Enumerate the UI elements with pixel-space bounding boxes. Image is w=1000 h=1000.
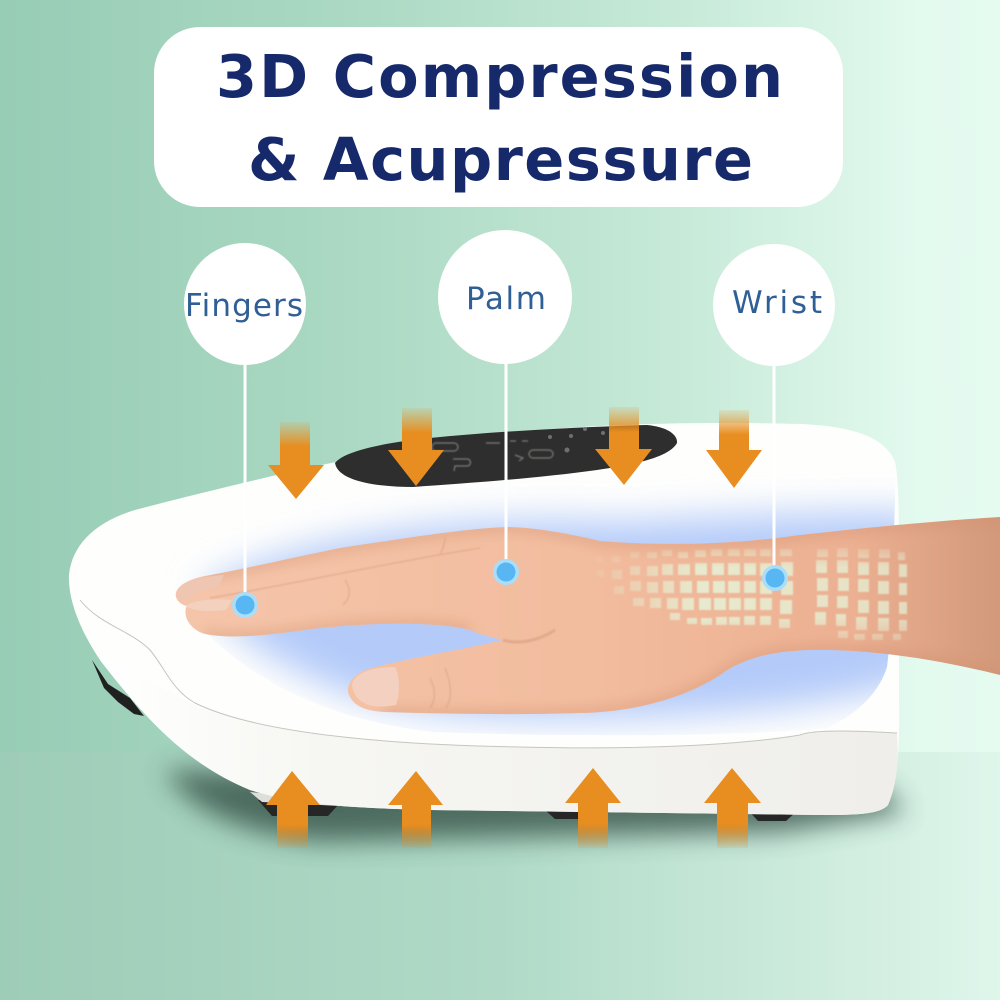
middle nail	[186, 599, 232, 611]
device feet	[258, 800, 798, 821]
callout: palm	[438, 230, 572, 585]
background floor	[0, 752, 1000, 1000]
arrow up 4	[704, 768, 761, 848]
hand edge shading	[205, 517, 1000, 714]
blue glow on top surface	[200, 512, 920, 719]
side vent	[92, 660, 144, 716]
callout: wrist	[713, 244, 835, 591]
hand shape	[176, 517, 1000, 714]
index nail	[176, 575, 224, 603]
thumb nail	[352, 667, 399, 707]
arrows pressing down	[268, 407, 762, 499]
compression grid on wrist	[596, 548, 907, 640]
arrow down 1	[268, 422, 324, 499]
callout: fingers: Fingers	[185, 288, 303, 324]
device body	[69, 423, 899, 815]
arrow down 4	[706, 410, 762, 488]
massager device	[69, 423, 920, 821]
arrow up 3	[565, 768, 621, 848]
title line 2: & Acupressure	[248, 125, 753, 194]
device lower band	[100, 660, 898, 815]
title pill	[154, 27, 843, 207]
control panel	[335, 425, 677, 487]
control panel lights	[548, 427, 605, 452]
callout: fingers	[184, 243, 306, 618]
arrow down 2	[388, 408, 444, 486]
control panel icons	[432, 441, 553, 471]
arrow up 1	[266, 771, 320, 848]
background wall	[0, 0, 1000, 752]
hand and forearm	[176, 517, 1000, 714]
callout: palm: Palm	[466, 281, 546, 317]
foot trim	[250, 792, 350, 806]
device seam	[80, 600, 897, 748]
arrow up 2	[388, 771, 443, 848]
device shadow	[165, 770, 905, 842]
finger creases	[210, 538, 555, 708]
arrow down 3	[595, 407, 652, 485]
arrows pressing up	[266, 768, 761, 848]
title line 1: 3D Compression	[216, 42, 783, 111]
callout: wrist: Wrist	[732, 285, 822, 321]
